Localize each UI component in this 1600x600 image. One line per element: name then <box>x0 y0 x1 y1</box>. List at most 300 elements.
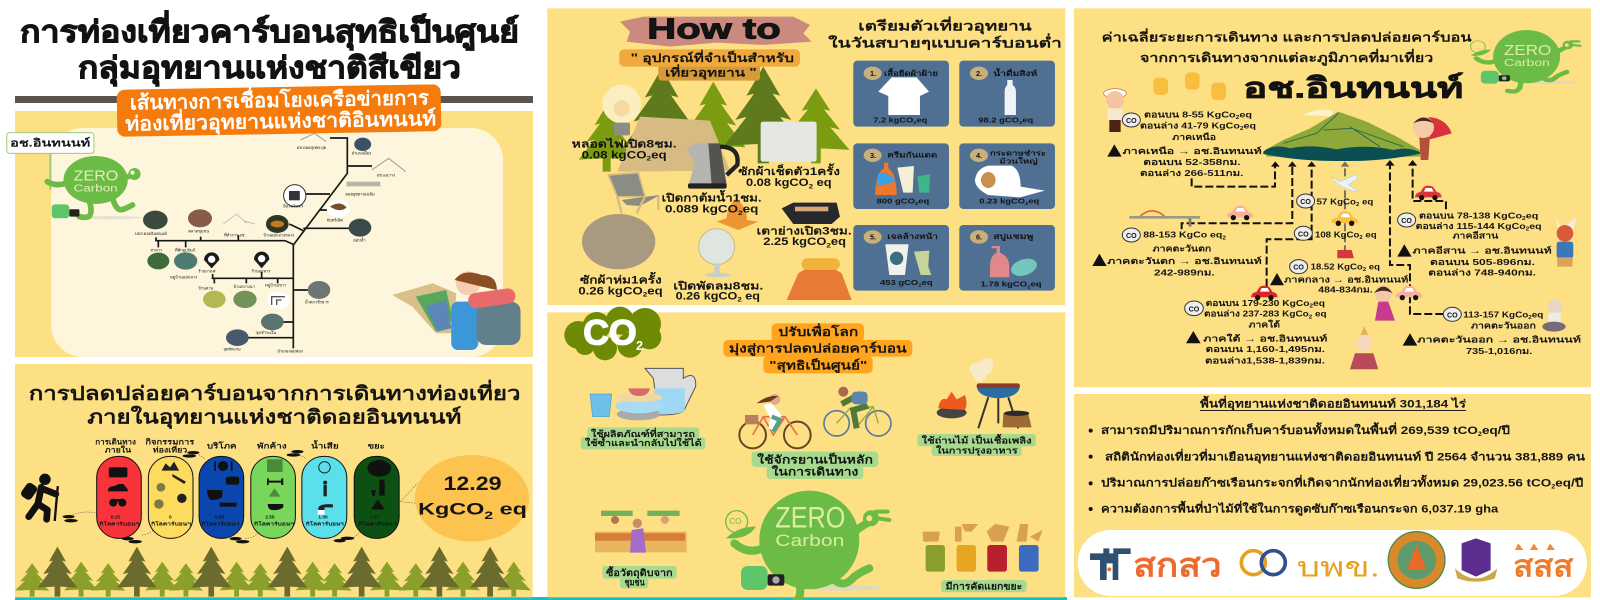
region: west: 88-153 KgCo eq <box>1143 230 1208 240</box>
station labels: บ้านกลางนา <box>233 284 255 289</box>
mascot: large zero carbon <box>726 491 889 600</box>
station labels: จุดพักแรม <box>223 347 241 353</box>
region: east <box>1403 307 1581 356</box>
card 2: water bottle: 2. <box>976 69 982 78</box>
item labels: 2 <box>738 210 743 217</box>
capsule: waste 1.57: กิโลคาร์บอนฯ <box>358 520 397 526</box>
region: northeast: CO <box>1401 216 1412 225</box>
character: southern dancer <box>1350 326 1378 369</box>
teal bottom bar <box>15 597 1067 600</box>
fact list: ปริมาณการปล่อยก๊าซเรือนกระจกที่เกิดจากนักท่องเที่ยวทั้งหมด 29,023.56 tCO <box>1101 478 1469 490</box>
station labels: จันทร์เลิศ <box>327 218 343 223</box>
label: reusable products: ใช้ซ้ำและนำกลับไปใช้ได้ <box>585 436 702 448</box>
heading: การปลดปล่อยคาร์บอนจากการเดินทางท่องเที่ยว <box>29 379 521 405</box>
region: south: ภาคใต้ <box>1249 319 1280 329</box>
trail footprints <box>63 450 417 543</box>
region: central <box>1270 260 1409 295</box>
item labels: เปิดพัดลม8ชม. <box>673 280 763 292</box>
capsule: waste 1.57 <box>354 456 399 538</box>
capsule: consumption 0.55 <box>199 456 244 538</box>
region: northeast: eq <box>1529 221 1542 231</box>
region: south: ตอนบน 179-230 KgCo <box>1206 298 1293 308</box>
icon: kettle <box>687 143 738 189</box>
upper route landmarks: ดอยอุทยานเฉลิม <box>345 191 375 197</box>
region: east: CO <box>1447 310 1458 319</box>
character: isan mask figure <box>1556 217 1577 267</box>
upper route landmarks: อช.ดอยสุเทพ-ปุย <box>297 145 327 151</box>
fact list <box>1089 422 1586 517</box>
station labels: ร้านอาหาร <box>252 268 271 273</box>
capsule: activities 0 <box>148 456 193 538</box>
heading: ภายในอุทยานแห่งชาติดอยอินทนนท์ <box>87 405 461 429</box>
station labels: ออบน้ำ <box>353 236 366 243</box>
title: กลุ่มอุทยานแห่งชาติสีเขียว <box>78 52 461 87</box>
capsule: accommodation 2.55: 2.55 <box>265 515 275 520</box>
fact list: eq/ปี <box>1555 477 1583 490</box>
logo: TSRI <box>1090 548 1222 585</box>
CO2 cloud: 2 <box>636 339 643 353</box>
region: air travel <box>1294 194 1377 241</box>
region: south: CO <box>1189 304 1200 313</box>
heading: How to: How to <box>647 13 781 45</box>
region: northeast: 2 <box>1526 227 1529 233</box>
item labels: 0.26 kgCO <box>578 285 630 297</box>
panel background <box>547 8 1065 305</box>
item labels: eq <box>831 236 846 248</box>
panel: average distance and emissions by region <box>1074 8 1591 387</box>
region: air travel: 2 <box>1356 202 1359 208</box>
card 5: facial gel: 453 gCO <box>880 278 910 287</box>
capsule: activities 0: 0 <box>169 515 172 520</box>
item labels: eq <box>647 285 663 297</box>
region: north: ภาคเหนือ <box>1172 132 1216 142</box>
capsule: transport 6.15 <box>97 456 141 538</box>
card 3: sunscreen: 2 <box>915 201 919 206</box>
logo: TSRI: สกสว <box>1133 548 1222 585</box>
icon: community market <box>595 511 687 553</box>
icon: recycling bins <box>923 524 1043 572</box>
label: charcoal: ใช้ถ่านไม้ เป็นเชื้อเพลิง <box>922 434 1032 446</box>
region: south: ภาคใต้ → อช.อินทนนท์ <box>1203 333 1328 343</box>
mountain <box>1263 110 1422 161</box>
column headings: บริโภค <box>207 440 237 450</box>
station labels: ร้านกาแฟ <box>198 268 216 273</box>
icon: cyclists <box>739 387 891 448</box>
station photos <box>143 199 371 346</box>
mascot: large zero carbon: Carbon <box>775 531 844 550</box>
item labels: ซักผ้าเช็ดตัว1ครั้ง <box>738 163 840 178</box>
station labels: ที่ทำการ อช. <box>224 233 246 238</box>
region: east: eq <box>1532 309 1543 319</box>
label: reusable products: ใช้ผลิตภัณฑ์ที่สามารถ <box>591 427 695 439</box>
label: charcoal <box>917 434 1036 456</box>
logo: PMU <box>1241 551 1380 583</box>
mascot: large zero carbon: CO <box>729 517 741 526</box>
column headings: ท่องเที่ยว <box>153 444 187 455</box>
logo: national parks seal <box>1388 532 1445 588</box>
card 3: sunscreen: 3. <box>870 151 876 160</box>
region: north: ภาคเหนือ → อช.อินทนนท์ <box>1123 146 1262 156</box>
region: northeast: eq <box>1526 210 1538 220</box>
panel background <box>15 364 533 597</box>
card 3: sunscreen: eq <box>918 196 929 205</box>
region: east: 735-1,016กม. <box>1466 346 1532 356</box>
total callout: 2 <box>484 510 493 522</box>
region: northeast: ตอนล่าง 115-144 KgCo <box>1416 221 1506 231</box>
station labels: บ้านสวน <box>198 285 213 290</box>
card 5: facial gel: 2 <box>918 283 922 288</box>
card 1: t-shirt: 7.2 kgCO <box>873 115 905 124</box>
item labels: 0.26 kgCO <box>676 290 728 302</box>
item labels: 0.08 kgCO <box>582 149 634 161</box>
column headings: พักค้าง <box>257 441 287 450</box>
card 1: t-shirt: 1. <box>870 69 876 78</box>
mascot: zero carbon: Carbon <box>1504 58 1550 69</box>
icon: plane <box>1332 175 1358 192</box>
mascot: large zero carbon: ZERO <box>775 501 845 534</box>
divider bar <box>15 96 533 103</box>
upper route landmarks: อินโดอินทร์ <box>283 203 304 208</box>
logo: PMU: บพข. <box>1297 552 1380 583</box>
card 1: t-shirt: เสื้อยืดผ้าฝ้าย <box>884 67 938 78</box>
item labels: 2 <box>737 297 742 304</box>
character: central lady <box>1374 285 1395 321</box>
region: west: ภาคตะวันตก → อช.อินทนนท์ <box>1107 256 1262 266</box>
fact list: 2 <box>1478 432 1483 438</box>
card 1: t-shirt <box>853 61 949 127</box>
CO2 cloud <box>564 307 661 360</box>
heading pills: มุ่งสู่การปลดปล่อยคาร์บอน <box>729 342 908 357</box>
card 4: toilet paper: 4. <box>976 151 982 160</box>
label: waste sorting: มีการคัดแยกขยะ <box>946 580 1022 591</box>
icon: campfire <box>717 198 758 230</box>
station labels: หมู่บ้านเขาว <box>265 283 286 289</box>
icon: fan <box>699 229 735 277</box>
station labels: ที่พักอุปถัมภ์ <box>175 248 196 254</box>
card 4: toilet paper: 0.23 kgCO <box>979 196 1015 205</box>
arrow heads <box>1271 160 1417 167</box>
station labels: จุดชำระเงิน <box>256 330 276 336</box>
card 5: facial gel: 5. <box>870 233 876 242</box>
item labels: eq <box>651 149 667 161</box>
mascot: small zero carbon with sign: ZERO <box>74 168 119 185</box>
heading: จากการเดินทางจากแต่ละภูมิภาคที่มาเที่ยว <box>1140 48 1433 66</box>
card 4: toilet paper: eq <box>1028 196 1039 205</box>
illustration: backpacker with map <box>392 271 521 350</box>
mascot: small zero carbon with sign: Carbon <box>74 184 118 195</box>
item labels: 0.08 kgCO <box>746 177 798 189</box>
label: reusable products <box>581 427 705 449</box>
mascot: small zero carbon with sign: อช.อินทนนท์ <box>10 137 90 150</box>
item labels <box>572 138 852 304</box>
panel: route map <box>15 111 533 357</box>
panel: how to <box>547 8 1065 305</box>
capsule: activities 0: กิโลคาร์บอนฯ <box>151 520 191 526</box>
card 2: water bottle: eq <box>1022 115 1033 124</box>
region: south: ตอนล่าง 237-283 KgCo <box>1204 309 1295 319</box>
station labels <box>135 218 366 354</box>
region: north: ตอนบน 52-358กม. <box>1143 157 1241 167</box>
icon: backpack <box>787 258 852 300</box>
region: west: CO <box>1126 231 1137 240</box>
region: north: ตอนบน 8-55 KgCo <box>1144 109 1217 119</box>
region: south: ตอนล่าง1,538-1,839กม. <box>1205 355 1325 365</box>
column headings: ขยะ <box>368 441 385 450</box>
station labels: หมู่บ้านแม่กลาง <box>170 274 197 280</box>
card 3: sunscreen: ครีมกันแดด <box>887 150 938 159</box>
column headings: การเดินทาง <box>95 437 136 446</box>
card 5: facial gel <box>853 225 949 291</box>
region: east: 2 <box>1528 315 1532 321</box>
panel: carbon emissions within the park <box>15 364 533 597</box>
total callout: eq <box>493 499 527 518</box>
region: air travel: 108 KgCo <box>1315 229 1355 239</box>
capsule: accommodation 2.55: กิโลคาร์บอนฯ <box>254 520 295 526</box>
item labels: 0.089 kgCO <box>665 204 723 216</box>
total callout: KgCO <box>418 499 466 518</box>
region: north: 2 <box>1240 126 1244 132</box>
region: east: 113-157 KgCo <box>1463 309 1520 319</box>
logo: ThaiHealth: สสส <box>1513 551 1574 584</box>
heading pills <box>723 323 912 373</box>
total callout <box>415 455 529 542</box>
icon: hiker <box>19 474 59 521</box>
card 4: toilet paper: กระดาษชำระ <box>990 149 1046 157</box>
upper route landmarks: อช.แม่วาง <box>377 173 395 178</box>
station labels: ผ่าดาว <box>151 248 162 253</box>
heading: ค่าเฉลี่ยระยะการเดินทาง และการปลดปล่อยคาร์บอน <box>1102 28 1472 45</box>
station labels: บขส.ดอยอินทนนท์ <box>135 231 167 236</box>
region: west <box>1092 228 1262 277</box>
item labels: eq <box>813 177 832 189</box>
panel background <box>1074 394 1591 597</box>
column headings: น้ำเสีย <box>311 439 339 450</box>
region: north <box>1107 109 1262 178</box>
region: south: ตอนบน 1,160-1,495กม. <box>1206 344 1325 354</box>
region: south: 2 <box>1310 304 1313 310</box>
panel background <box>1074 8 1591 387</box>
region: north: CO <box>1126 116 1137 125</box>
region: north: eq <box>1239 109 1252 119</box>
item labels: 2 <box>647 156 652 163</box>
region: east: ภาคตะวันออก <box>1471 320 1536 330</box>
region: northeast: ตอนล่าง 748-940กม. <box>1428 267 1536 277</box>
label: cycling <box>752 452 878 479</box>
fact list: 2 <box>1551 485 1556 491</box>
heading <box>1102 28 1472 104</box>
capsule: wastewater 1.00: กิโลคาร์บอนฯ <box>306 520 344 526</box>
region: northeast <box>1397 210 1552 277</box>
station labels: อำเภอจอมทอง <box>277 349 303 354</box>
heading pills: "สุทธิเป็นศูนย์" <box>769 357 867 373</box>
capsule: consumption 0.55: 0.55 <box>215 515 225 520</box>
region: northeast: ตอนบน 505-896กม. <box>1430 257 1535 267</box>
mascot: zero carbon: ZERO <box>1504 42 1551 59</box>
card 6: soap and shampoo <box>959 225 1055 291</box>
region: northeast: ภาคอีสาน → อช.อินทนนท์ <box>1413 245 1552 255</box>
icon: bridge <box>1129 211 1200 227</box>
region: north: eq <box>1244 120 1256 130</box>
fact list: ความต้องการพื้นที่ป่าไม้ที่ใช้ในการดูดซับก๊าซเรือนกระจก 6,037.19 gha <box>1101 501 1499 517</box>
partner logos <box>1078 530 1587 596</box>
title <box>20 10 519 87</box>
orange subtitle banner <box>117 82 441 137</box>
trees <box>579 67 850 172</box>
item labels: eq <box>743 204 758 216</box>
card 4: toilet paper: ม้วนใหญ่ <box>999 157 1038 166</box>
panel: park facts and partners <box>1074 394 1591 597</box>
icon: dishes and pitcher <box>590 368 696 420</box>
heading: prepare for the trip: ในวันสบายๆแบบคาร์บอนต่ำ <box>828 32 1062 50</box>
region: central: 2 <box>1363 267 1366 273</box>
region: air travel: eq <box>1363 229 1377 239</box>
item labels: 2 <box>643 292 648 299</box>
card 3: sunscreen <box>853 143 949 209</box>
item labels: หลอดไฟเปิด8ชม. <box>572 138 677 151</box>
card 2: water bottle <box>959 61 1055 127</box>
label: cycling: ในการเดินทาง <box>772 465 858 479</box>
column headings: กิจกรรมการ <box>145 437 195 446</box>
map background <box>51 128 503 357</box>
icon: charcoal grill <box>937 358 1032 428</box>
capsule: accommodation 2.55 <box>251 456 295 538</box>
region: south: eq <box>1312 309 1327 319</box>
capsule: transport 6.15: 6.15 <box>111 515 120 520</box>
heading: prepare for the trip: เตรียมตัวเที่ยวอุทยาน <box>858 16 1033 35</box>
character: elderly man <box>1542 299 1566 332</box>
region: air travel: CO <box>1298 229 1309 238</box>
icon: chair <box>608 173 660 213</box>
region: west: 242-989กม. <box>1154 267 1215 277</box>
item labels: eq <box>742 290 760 302</box>
card 2: water bottle: น้ำดื่มสิงห์ <box>993 67 1037 78</box>
item labels: 2 <box>809 183 813 190</box>
card 4: toilet paper <box>959 143 1055 209</box>
fact list: eq/ปี <box>1482 424 1510 437</box>
heading <box>29 379 521 429</box>
region: central: ภาคกลาง → อช.อินทนนท์ <box>1284 275 1409 285</box>
card 4: toilet paper: 2 <box>1025 201 1029 206</box>
CO2 cloud: CO <box>583 313 637 352</box>
equipment subtitle <box>619 49 800 81</box>
capsule: transport 6.15: กิโลคาร์บอนฯ <box>99 520 140 526</box>
label: local materials: ชุมชน <box>625 578 645 589</box>
card 6: soap and shampoo: 6. <box>976 233 982 242</box>
region: south: eq <box>1313 298 1325 308</box>
item labels: 2 <box>826 242 831 249</box>
card 2: water bottle: 98.2 gCO <box>978 115 1010 124</box>
label: local materials <box>602 565 677 589</box>
route lines <box>156 138 372 348</box>
tree row <box>15 547 531 597</box>
region: central: 484-834กม. <box>1318 285 1373 295</box>
heading: How to <box>620 13 812 47</box>
label: charcoal: ในการปรุงอาหาร <box>936 444 1018 456</box>
region: south <box>1185 298 1328 365</box>
orange subtitle banner: ท่องเที่ยวอุทยานแห่งชาติอินทนนท์ <box>125 103 436 137</box>
region: east: ภาคตะวันออก → อช.อินทนนท์ <box>1417 335 1581 345</box>
column headings: ภายใน <box>105 445 132 455</box>
label: waste sorting <box>941 580 1027 592</box>
card 1: t-shirt: eq <box>917 115 927 124</box>
region: north: 2 <box>1236 115 1239 121</box>
region: air travel: CO <box>1300 197 1311 206</box>
region: west: 2 <box>1222 235 1226 241</box>
upper route landmarks <box>283 133 406 208</box>
region: central: CO <box>1293 263 1304 272</box>
item labels: 2.25 kgCO <box>763 236 815 248</box>
icon: fabric <box>582 214 655 269</box>
card 6: soap and shampoo: 2 <box>1027 284 1031 289</box>
dashed route arrows <box>1182 165 1446 314</box>
capsule: consumption 0.55: กิโลคาร์บอนฯ <box>202 520 239 526</box>
mascot: zero carbon <box>1471 30 1580 91</box>
card 2: water bottle: 2 <box>1019 120 1023 125</box>
region: air travel: 57 KgCo <box>1317 196 1352 206</box>
fact list: สามารถมีปริมาณการกักเก็บคาร์บอนทั้งหมดในพื้นที่ 269,539 tCO <box>1101 425 1408 437</box>
equipment subtitle: " อุปกรณ์ที่จำเป็นสำหรับ <box>631 49 794 66</box>
region: northeast: ตอนบน 78-138 KgCo <box>1419 210 1502 220</box>
upper route landmarks: อำเภอเมือง <box>352 150 371 155</box>
card 3: sunscreen: 800 gCO <box>877 196 906 205</box>
fact list: สถิตินักท่องเที่ยวที่มาเยือนอุทยานแห่งชาติดอยอินทนนท์ ปี 2564 จำนวน 381,889 คน <box>1105 449 1586 465</box>
equipment subtitle: เที่ยวอุทยาน " <box>665 63 757 80</box>
card 6: soap and shampoo: 1.78 kgCO <box>981 280 1016 289</box>
panel: adapt for the world <box>547 307 1065 600</box>
character: northern woman with parasol <box>1413 117 1452 160</box>
column headings <box>95 437 385 455</box>
station labels: ตลาดชุมชน <box>188 228 209 234</box>
lanterns <box>1153 72 1226 100</box>
label: cycling: ใช้จักรยานเป็นหลัก <box>757 452 873 466</box>
station labels: น้ำตกวชิรธาร <box>305 297 330 304</box>
icon: grill <box>782 203 840 224</box>
card 6: soap and shampoo: สบู่แชมพู <box>993 232 1034 242</box>
heading: prepare for the trip <box>828 16 1062 50</box>
icon: towel <box>761 122 817 162</box>
item labels: เตาย่างเปิด3ชม. <box>757 225 852 237</box>
mascot: small zero carbon with sign <box>7 133 142 219</box>
orange subtitle banner: เส้นทางการเชื่อมโยงเครือข่ายการ <box>130 82 429 115</box>
region: south: 2 <box>1309 314 1312 320</box>
region: north: ตอนล่าง 41-79 KgCo <box>1140 120 1221 130</box>
heading pills: ปรับเพื่อโลก <box>778 323 858 339</box>
card 5: facial gel: เจลล้างหน้า <box>887 232 938 241</box>
heading: อช.อินทนนท์ <box>1243 73 1463 104</box>
heading: พื้นที่อุทยานแห่งชาติดอยอินทนนท์ 301,184 ไร่ <box>1200 396 1466 412</box>
logo: university <box>1455 538 1497 582</box>
title: การท่องเที่ยวคาร์บอนสุทธิเป็นศูนย์ <box>20 10 519 51</box>
region: northeast: ภาคอีสาน <box>1453 230 1498 240</box>
character: northern man <box>1104 89 1126 132</box>
total callout: 12.29 <box>443 473 502 495</box>
region: northeast: 2 <box>1522 216 1526 222</box>
label: local materials: ซื้อวัตถุดิบจาก <box>606 565 673 579</box>
capsule: wastewater 1.00: 1.00 <box>318 515 328 520</box>
panel background <box>547 312 1065 597</box>
capsule: waste 1.57: 1.57 <box>370 515 380 520</box>
icon: light bulb <box>602 85 641 135</box>
capsule: wastewater 1.00 <box>302 456 347 538</box>
region: central: 18.52 KgCo <box>1311 261 1356 271</box>
card 6: soap and shampoo: eq <box>1031 280 1042 289</box>
icon: tent <box>617 117 730 172</box>
card 1: t-shirt: 2 <box>913 120 917 125</box>
station labels: บ้านแม่กลางหลวง <box>263 233 294 238</box>
region: air travel: eq <box>1359 196 1373 206</box>
region: north: ตอนล่าง 266-511กม. <box>1140 168 1243 178</box>
item labels: เปิดกาต้มน้ำ1ชม. <box>662 190 762 205</box>
